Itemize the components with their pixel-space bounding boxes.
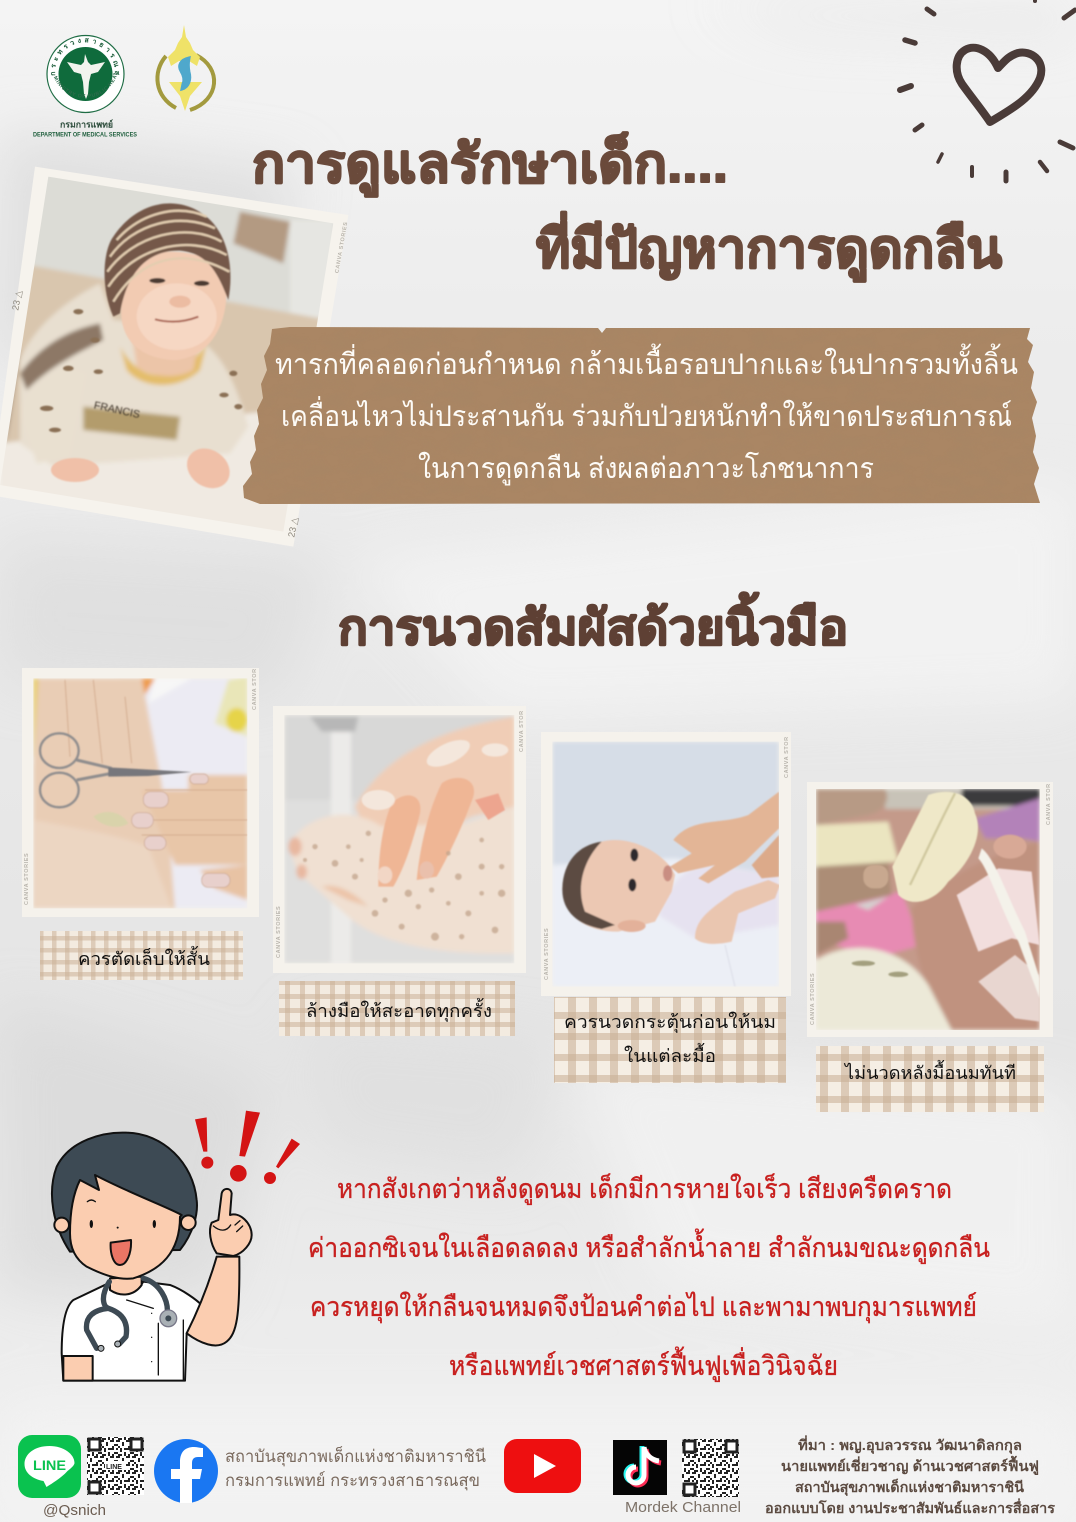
QR code: LINE: LINE (106, 1464, 122, 1471)
panel: bottle feeding photo card (807, 782, 1053, 1037)
photo: bottle feeding infant with tube dressing (816, 789, 1040, 1030)
panel: hero baby photo: 23 △ (10, 289, 24, 311)
panel: cut nails photo card: CANVA STOR (252, 668, 258, 710)
intro text: ในการดูดกลืน ส่งผลต่อภาวะโภชนาการ (418, 451, 874, 486)
warning text: หากสังเกตว่าหลังดูดนม เด็กมีการหายใจเร็ว เสียงครืดคราด (337, 1171, 952, 1205)
QR code: TikTok (682, 1439, 739, 1497)
panel: hero baby photo: 23 △ (286, 516, 300, 538)
heading: finger massage: การนวดสัมผัสด้วยนิ้วมือ (338, 592, 848, 655)
photo: soapy hands under tap (284, 715, 514, 963)
heart doodle (900, 0, 1075, 181)
panel: baby mouth massage photo card (541, 732, 791, 996)
icon: TikTok (613, 1440, 667, 1495)
icon: YouTube (504, 1439, 581, 1493)
panel: hand washing photo card: CANVA STOR (519, 710, 525, 752)
label: massage before feeding: ในแต่ละมื้อ (624, 1043, 716, 1066)
label: massage before feeding: ควรนวดกระตุ้นก่อนให้นม (564, 1011, 776, 1033)
label: no massage after feeding (816, 1046, 1044, 1112)
panel: brown torn paper intro (240, 325, 1042, 507)
warning text: ควรหยุดให้กลืนจนหมดจึงป้อนคำต่อไป และพามาพบกุมารแพทย์ (310, 1291, 977, 1324)
label: cut nails short (40, 931, 243, 980)
text: source credits (765, 1435, 1055, 1516)
photo: smiling baby in striped hat: FRANCIS (93, 400, 141, 421)
icon: LINE (18, 1435, 81, 1498)
title: การดูแลรักษาเด็ก.... (252, 132, 728, 197)
label: wash hands clean: ล้างมือให้สะอาดทุกครั้ง (306, 998, 492, 1022)
panel: cut nails photo card (22, 668, 259, 917)
panel: hero baby photo: CANVA STORIES (334, 221, 349, 274)
panel: hand washing photo card: CANVA STORIES (276, 906, 282, 958)
panel: hero baby photo (0, 160, 350, 560)
intro text: ทารกที่คลอดก่อนกำหนด กล้ามเนื้อรอบปากและในปากรวมทั้งลิ้น (275, 343, 1018, 381)
text: source credits: ออกแบบโดย งานประชาสัมพันธ์และการสื่อสาร (765, 1498, 1055, 1516)
panel: baby mouth massage photo card: CANVA STOR (784, 736, 790, 778)
label: wash hands clean (279, 981, 515, 1036)
icon: Facebook (154, 1439, 218, 1503)
photo: baby having mouth massaged (552, 742, 780, 987)
icon: red exclamation marks (195, 1111, 300, 1184)
logo: Ministry of Public Health: DEPARTMENT OF MEDICAL SERVICES (33, 132, 137, 138)
icon: LINE: LINE (33, 1457, 66, 1473)
warning text: หรือแพทย์เวชศาสตร์ฟื้นฟูเพื่อวินิจฉัย (449, 1346, 838, 1382)
text: Mordek Channel: Mordek Channel (625, 1499, 741, 1516)
text: institute name (225, 1445, 486, 1491)
panel: hand washing photo card (273, 706, 526, 973)
panel: baby mouth massage photo card: CANVA STORIES (544, 928, 550, 980)
handle: Qsnich: @Qsnich (43, 1502, 106, 1519)
logo: Department of Medical Services (157, 25, 214, 111)
label: massage before feeding (554, 997, 786, 1083)
QR code: LINE (87, 1437, 144, 1495)
panel: bottle feeding photo card: CANVA STOR (1046, 783, 1052, 825)
label: no massage after feeding: ไม่นวดหลังมื้อนมทันที (843, 1060, 1016, 1083)
text: source credits: ที่มา : พญ.อุบลวรรณ วัฒนาดิลกกุล (798, 1435, 1022, 1454)
panel: cut nails photo card: CANVA STORIES (24, 853, 30, 905)
warning text: ค่าออกซิเจนในเลือดลดลง หรือสำลักน้ำลาย สำลักนมขณะดูดกลืน (308, 1228, 990, 1264)
text: institute name: สถาบันสุขภาพเด็กแห่งชาติมหาราชินี (225, 1445, 486, 1467)
label: cut nails short: ควรตัดเล็บให้สั้น (78, 946, 210, 969)
photo: scissors on a palm (33, 677, 247, 908)
logo: Ministry of Public Health: กรมการแพทย์ (60, 118, 113, 130)
title: ที่มีปัญหาการดูดกลืน (536, 211, 1002, 282)
illustration: doctor pointing up (52, 1111, 300, 1381)
text: institute name: กรมการแพทย์ กระทรวงสาธารณสุข (225, 1471, 480, 1491)
photo: smiling baby in striped hat (2, 176, 333, 532)
warning text (308, 1171, 990, 1382)
intro text: เคลื่อนไหวไม่ประสานกัน ร่วมกับป่วยหนักทำให้ขาดประสบการณ์ (281, 396, 1012, 433)
title (252, 132, 1002, 282)
logo: Ministry of Public Health (33, 34, 137, 138)
text: source credits: นายแพทย์เชี่ยวชาญ ด้านเวชศาสตร์ฟื้นฟู (781, 1455, 1039, 1475)
text: source credits: สถาบันสุขภาพเด็กแห่งชาติมหาราชินี (795, 1478, 1024, 1496)
intro text (275, 343, 1018, 486)
panel: bottle feeding photo card: CANVA STORIES (810, 973, 816, 1025)
